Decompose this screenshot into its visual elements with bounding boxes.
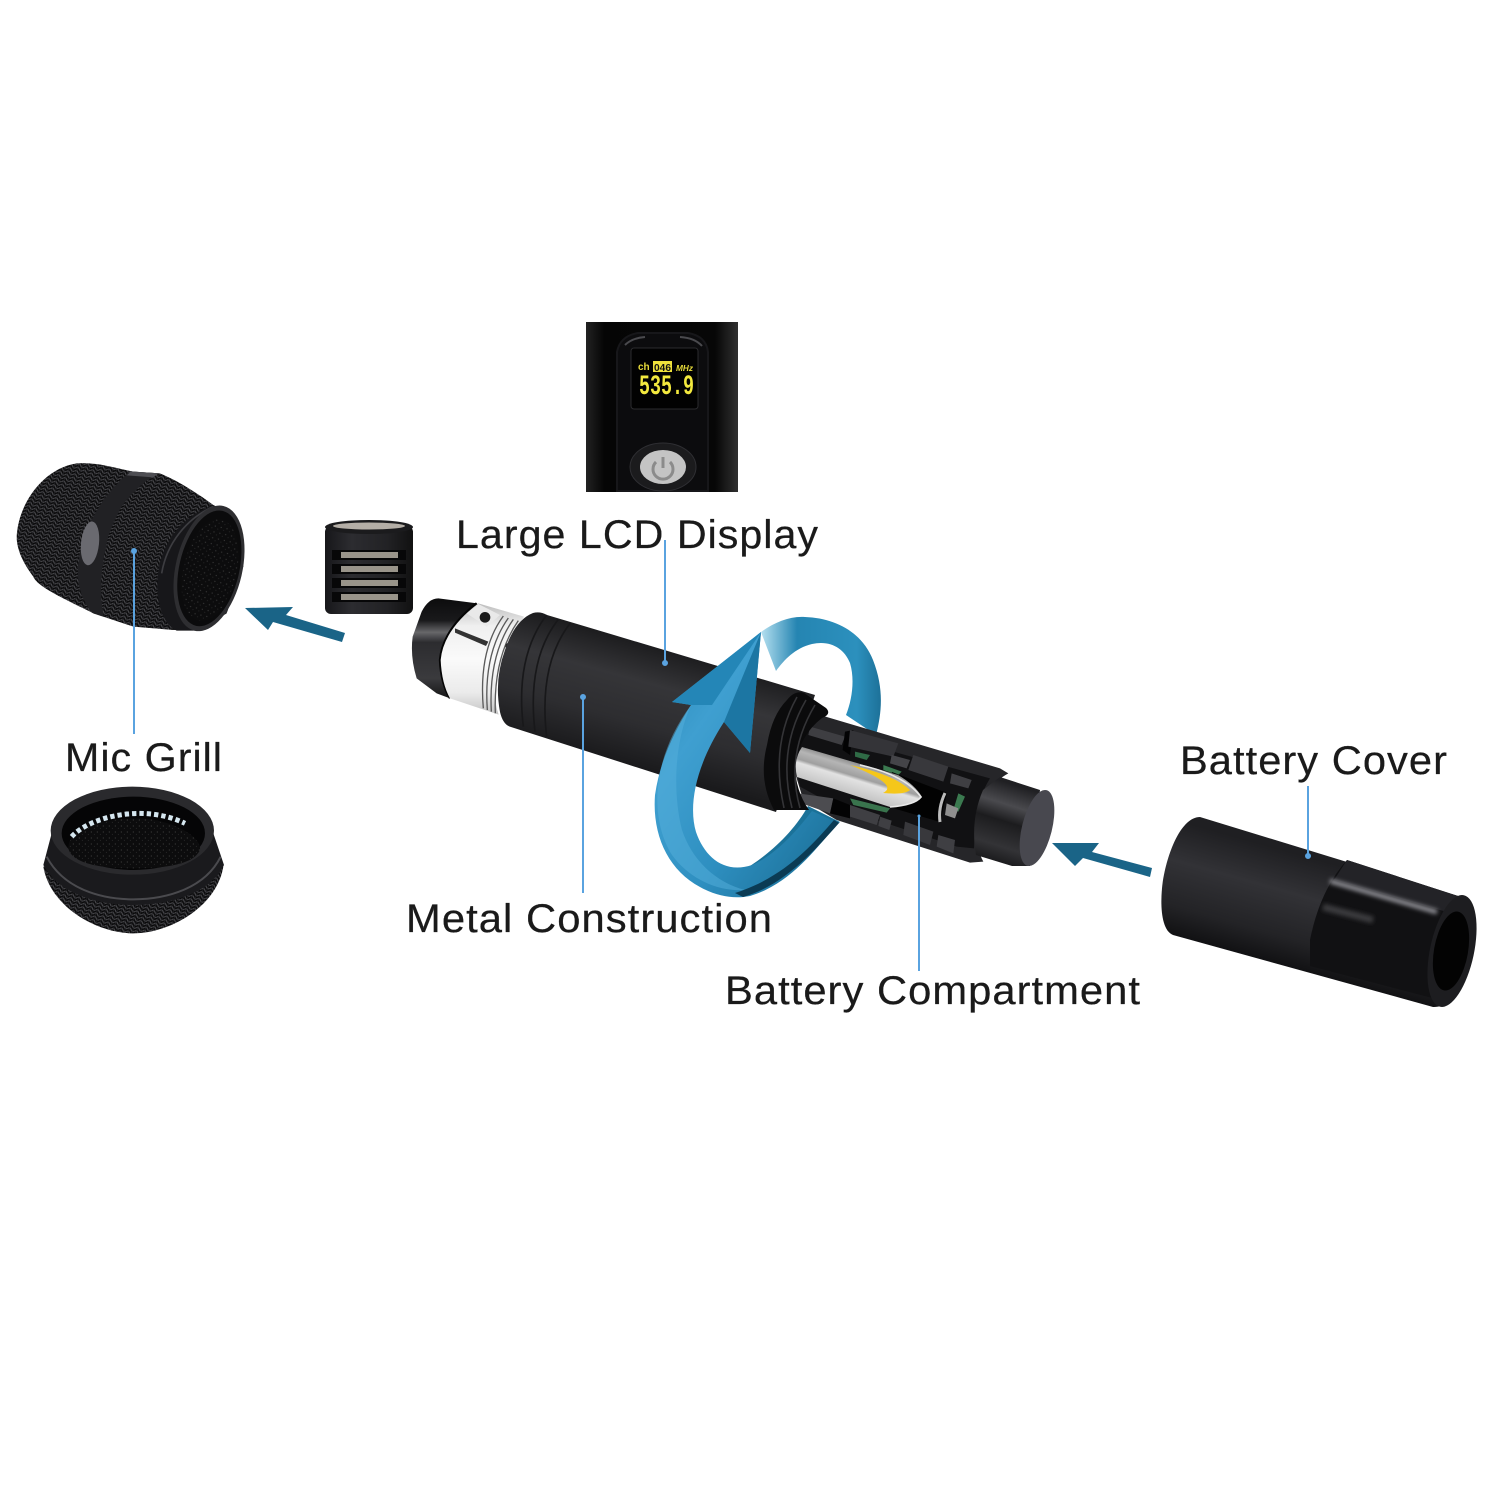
- label: battery compartment: Battery Compartment: [725, 969, 1141, 1013]
- product photo: LCD display close-up: [586, 322, 738, 492]
- leader line: LCD display: [662, 540, 668, 666]
- rotation ring: rear arc: [761, 617, 881, 735]
- head end: [412, 598, 524, 715]
- metal handle: [498, 612, 815, 812]
- leader line: battery cover: [1306, 786, 1310, 858]
- leader line: mic grill: [132, 548, 136, 734]
- label: metal construction: Metal Construction: [406, 897, 773, 941]
- capsule element: [325, 520, 413, 614]
- silver collar: [441, 603, 524, 715]
- leader line: battery compartment: [918, 815, 920, 971]
- lcd readout: [638, 361, 694, 403]
- label: battery cover: Battery Cover: [1180, 739, 1448, 783]
- arrow: to mic grill: [245, 607, 345, 642]
- leader line: metal construction: [580, 694, 586, 893]
- battery cover photo: [1161, 817, 1485, 1011]
- lcd readout: 535.9: [639, 372, 694, 403]
- lcd readout: ch: [638, 362, 650, 373]
- arrow: to microphone end: [1052, 843, 1152, 877]
- battery: [796, 747, 947, 822]
- arrowhead shaded face: [724, 632, 761, 753]
- mic grill photo: [17, 463, 256, 638]
- lcd readout: MHz: [676, 364, 693, 373]
- label: large LCD display: Large LCD Display: [456, 513, 819, 557]
- power button: [630, 443, 696, 491]
- lcd readout: 046: [654, 363, 671, 374]
- threaded collar: [764, 692, 828, 810]
- rotation ring: front arc with arrowhead: [655, 632, 839, 897]
- inner band shading: [657, 705, 745, 890]
- rotation ring: lower rear arc: [740, 806, 840, 880]
- microphone assembly: [412, 598, 1061, 869]
- end cap: [974, 777, 1061, 869]
- label: mic grill: Mic Grill: [65, 736, 223, 780]
- mic grill lower cap photo: [43, 787, 224, 933]
- battery compartment: [790, 715, 1008, 863]
